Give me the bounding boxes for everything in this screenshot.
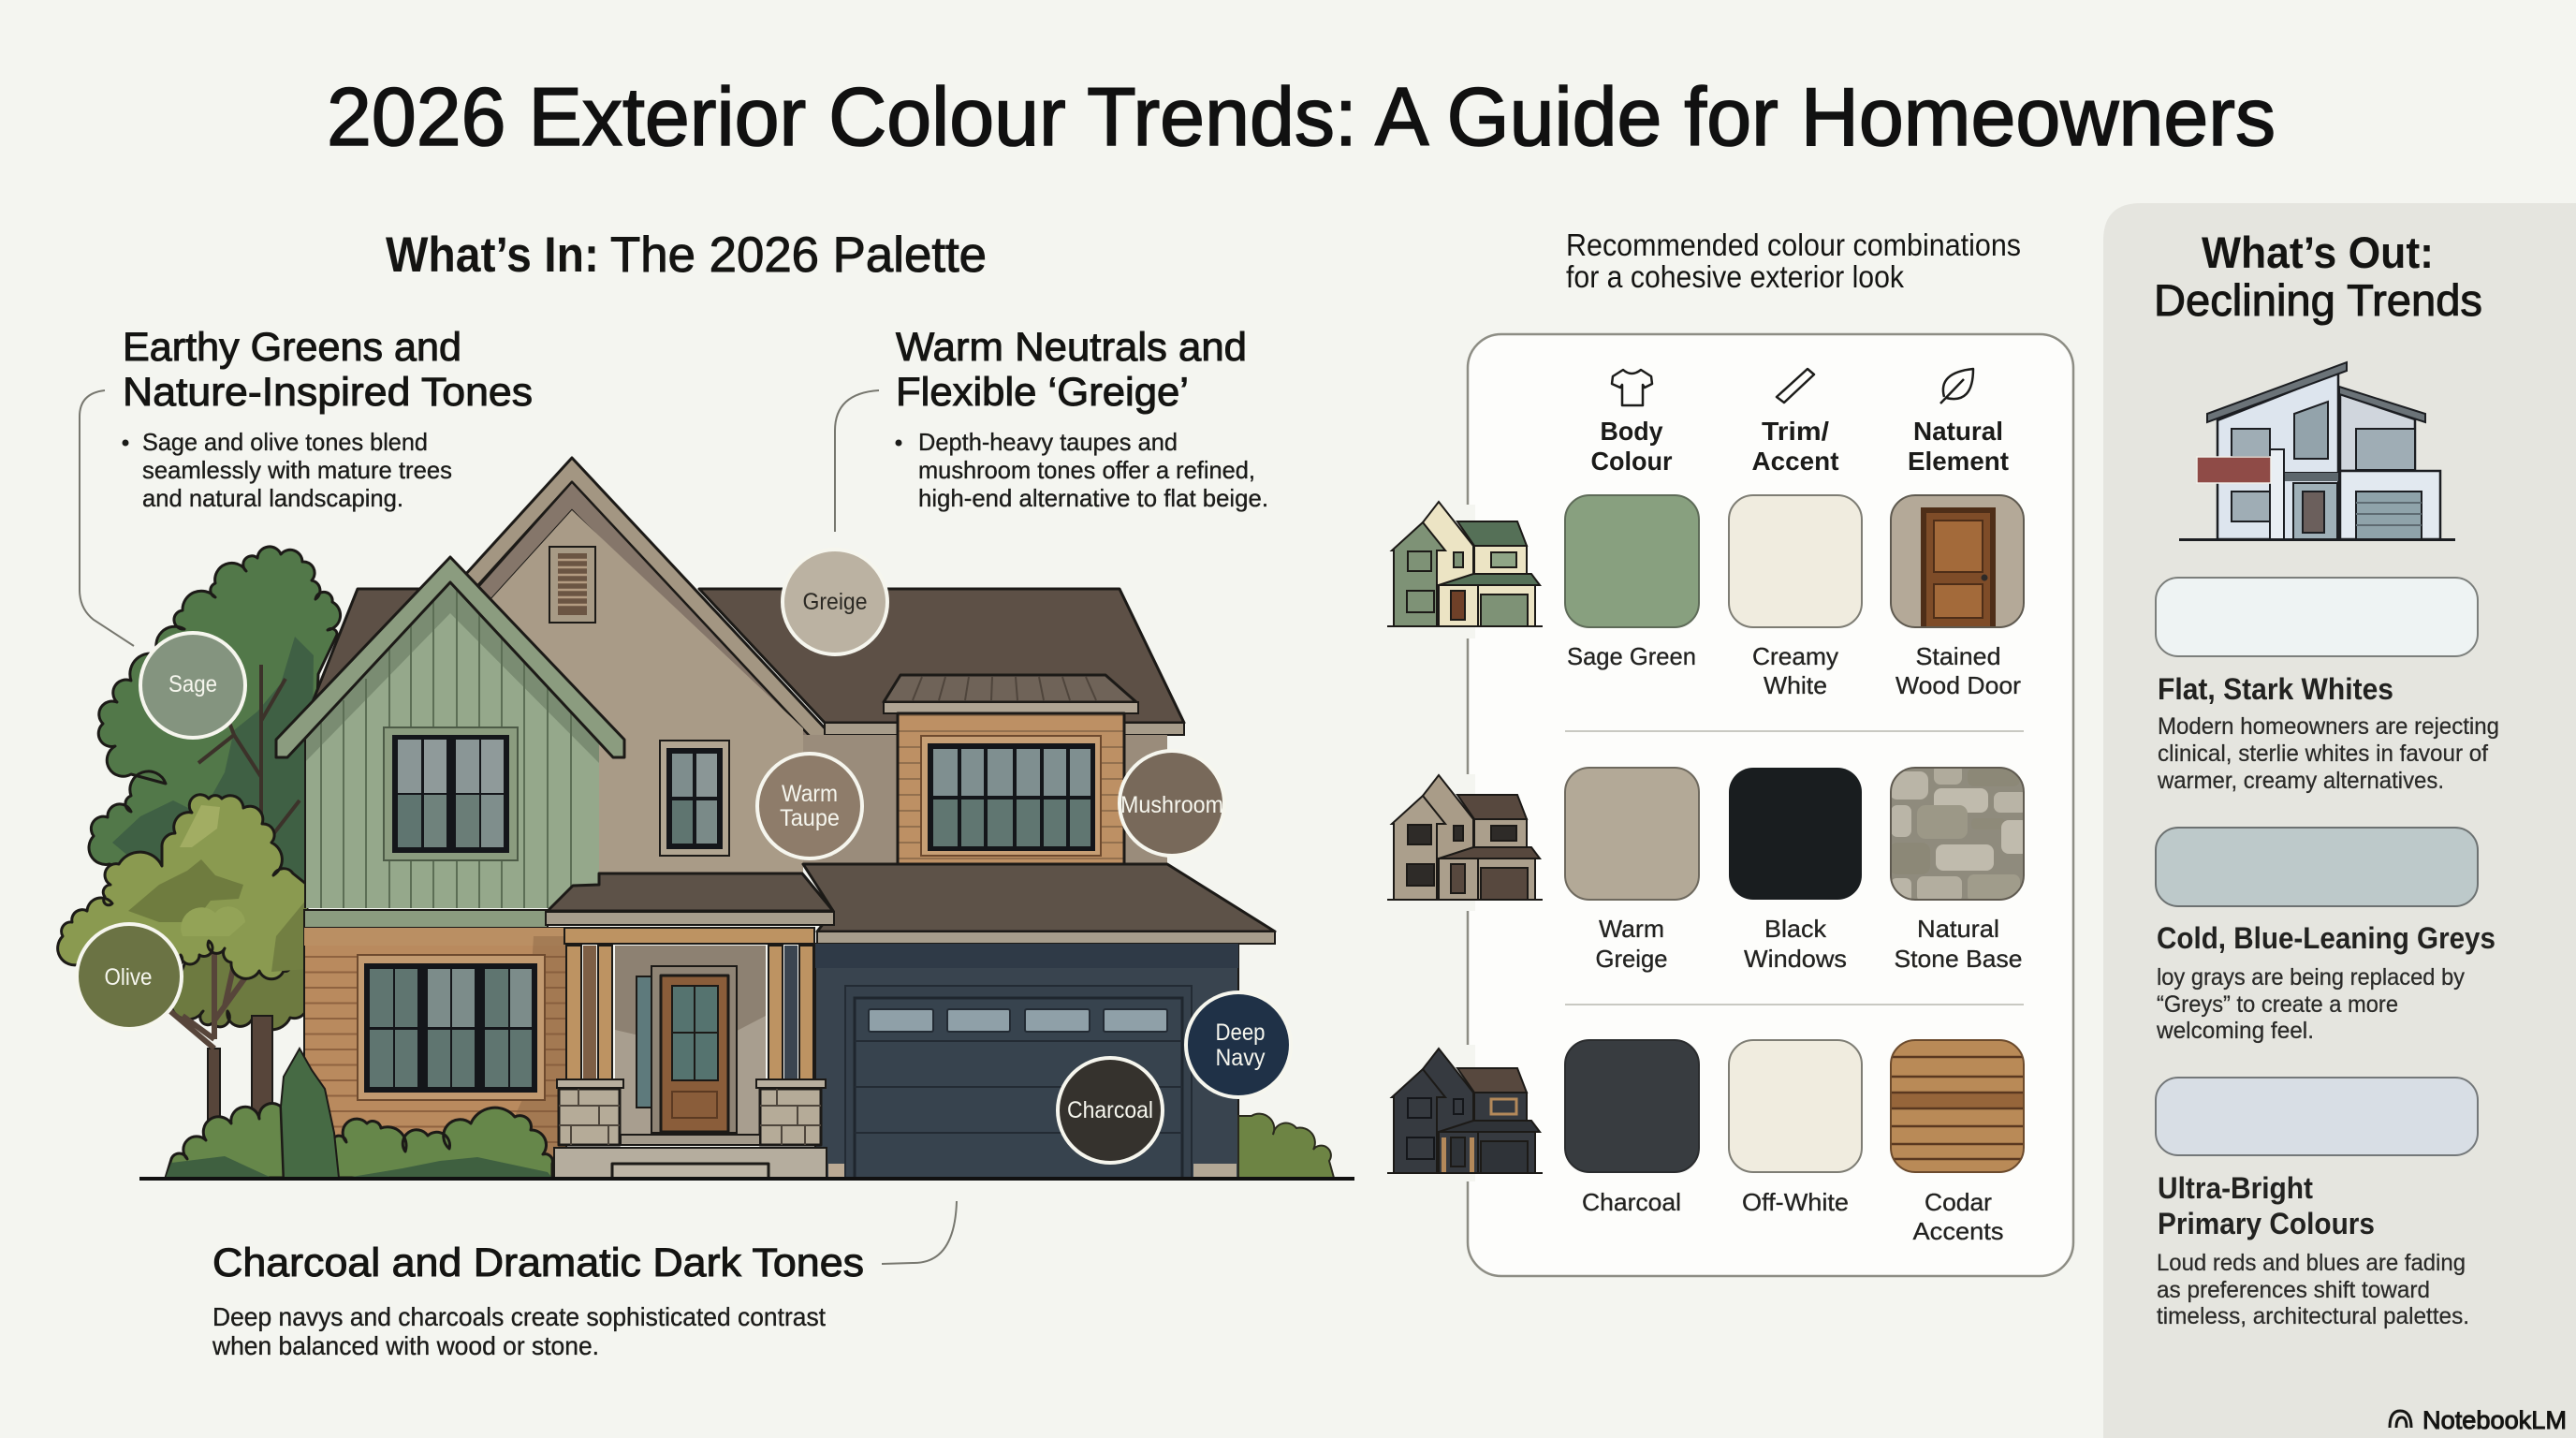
swatch: olive: Olive bbox=[105, 964, 152, 990]
panel: colour combinations bbox=[1468, 334, 2073, 1276]
section heading: what's in bbox=[386, 227, 987, 283]
trend: cold blue-leaning greys: Cold, Blue-Leaning Greys bbox=[2157, 921, 2496, 955]
back tree bbox=[89, 547, 341, 889]
row 1: sage green bbox=[1565, 495, 1699, 670]
section heading: what's in: What’s In: bbox=[386, 227, 599, 283]
back roof left bbox=[312, 589, 440, 704]
trend: ultra-bright primary colours: as preferences shift toward bbox=[2157, 1277, 2430, 1303]
row divider 2 bbox=[1565, 1004, 2024, 1005]
trend: cold blue-leaning greys bbox=[2156, 921, 2496, 1044]
swatch: charcoal bbox=[1058, 1058, 1163, 1163]
row 3: cedar accents: Codar bbox=[1925, 1188, 1992, 1216]
trend: ultra-bright primary colours: Primary Colours bbox=[2158, 1207, 2375, 1240]
steps bbox=[554, 1135, 827, 1179]
row 3: cedar accents: Accents bbox=[1913, 1217, 2003, 1245]
trend: flat stark whites: clinical, sterlie whites in favour of bbox=[2158, 741, 2488, 767]
panel: what's out bbox=[2103, 203, 2576, 1438]
swatch: stark white bbox=[2156, 578, 2478, 656]
row 2: black windows: Black bbox=[1764, 915, 1827, 943]
bullet text: earthy greens: seamlessly with mature trees bbox=[142, 456, 452, 484]
row 1: creamy white: Creamy bbox=[1752, 642, 1838, 670]
icon: sage mini house bbox=[1387, 502, 1543, 627]
foundation shrubs bbox=[166, 1049, 1334, 1178]
taupe wall bbox=[440, 510, 803, 875]
column header: trim accent: Trim/ bbox=[1762, 417, 1829, 446]
column header: natural element bbox=[1908, 369, 2009, 476]
swatch: mushroom bbox=[1120, 751, 1224, 856]
section heading: what's in: The 2026 Palette bbox=[610, 227, 987, 283]
small taupe window bbox=[660, 741, 729, 856]
bullet text: warm neutrals: high-end alternative to flat beige. bbox=[918, 484, 1268, 512]
combinations intro text: Recommended colour combinations bbox=[1566, 227, 2021, 262]
notebooklm logo: NotebookLM bbox=[2422, 1406, 2567, 1434]
leader line: earthy greens bbox=[80, 390, 134, 646]
swatch: ultra-bright bbox=[2156, 1078, 2478, 1155]
green gable wall bbox=[304, 582, 599, 908]
navy garage wall bbox=[815, 944, 1238, 1179]
swatch: warm taupe: Taupe bbox=[780, 805, 840, 831]
row 3: cedar accents bbox=[1891, 1040, 2024, 1245]
main gable roof bbox=[426, 458, 828, 741]
leader line: warm neutrals bbox=[835, 390, 879, 532]
trend: flat stark whites: Flat, Stark Whites bbox=[2158, 672, 2393, 706]
green gable trim bbox=[276, 557, 624, 757]
swatch: warm taupe: Warm bbox=[782, 781, 838, 807]
row 2: natural stone base: Stone Base bbox=[1895, 945, 2022, 973]
callout: charcoal and dark tones: when balanced with wood or stone. bbox=[212, 1331, 599, 1360]
front door bbox=[661, 976, 728, 1132]
row 3: charcoal: Charcoal bbox=[1582, 1188, 1681, 1216]
trend: flat stark whites: Modern homeowners are rejecting bbox=[2158, 713, 2499, 740]
column header: trim accent bbox=[1752, 369, 1838, 476]
swatch: cold grey bbox=[2156, 828, 2478, 906]
column header: trim accent: Accent bbox=[1752, 447, 1838, 476]
icon: greige mini house bbox=[1387, 775, 1543, 901]
heading: warm neutrals bbox=[896, 325, 1247, 415]
callout: earthy greens bbox=[122, 325, 533, 512]
swatch: deep navy: Navy bbox=[1215, 1045, 1266, 1071]
callout: warm neutrals bbox=[895, 325, 1268, 512]
column header: natural element: Element bbox=[1908, 447, 2009, 476]
heading: warm neutrals: Warm Neutrals and bbox=[896, 325, 1247, 370]
icon: charcoal mini house bbox=[1387, 1049, 1543, 1174]
house illustration bbox=[58, 458, 1354, 1181]
column header: natural element: Natural bbox=[1913, 417, 2003, 446]
row 1: sage green: Sage Green bbox=[1567, 642, 1696, 670]
column header: body colour bbox=[1591, 370, 1673, 476]
heading: what's out: What’s Out: bbox=[2202, 227, 2434, 277]
trend: cold blue-leaning greys: welcoming feel. bbox=[2156, 1018, 2314, 1044]
row 1: stained wood door bbox=[1891, 495, 2024, 699]
swatch: deep navy bbox=[1186, 992, 1291, 1097]
trend: ultra-bright primary colours: timeless, architectural palettes. bbox=[2157, 1303, 2469, 1329]
combinations intro text bbox=[1566, 227, 2021, 294]
row 1: creamy white: White bbox=[1764, 671, 1827, 699]
swatch: sage bbox=[140, 633, 245, 738]
row 2: black windows bbox=[1729, 768, 1862, 973]
bullet text: warm neutrals bbox=[895, 428, 1268, 512]
upper green window bbox=[384, 727, 518, 860]
row 2: natural stone base: Natural bbox=[1917, 915, 1999, 943]
heading: warm neutrals: Flexible ‘Greige’ bbox=[896, 370, 1189, 415]
garage roof bbox=[803, 864, 1275, 932]
trend: ultra-bright primary colours: Loud reds and blues are fading bbox=[2157, 1250, 2466, 1276]
swatch: olive bbox=[77, 924, 182, 1029]
porch fascia bbox=[546, 912, 834, 925]
column header: body colour: Body bbox=[1601, 417, 1663, 446]
porch bbox=[564, 928, 814, 1135]
row 1: creamy white bbox=[1729, 495, 1862, 699]
row 2: black windows: Windows bbox=[1744, 945, 1847, 973]
swatch: deep navy: Deep bbox=[1215, 1020, 1266, 1046]
row 2: warm greige: Greige bbox=[1595, 945, 1668, 973]
bullet text: warm neutrals: Depth-heavy taupes and bbox=[918, 428, 1178, 456]
porch roof bbox=[548, 873, 833, 911]
swatch: mushroom: Mushroom bbox=[1120, 792, 1223, 818]
title: 2026 Exterior Colour Trends: A Guide for Homeowners bbox=[327, 70, 2276, 163]
callout: charcoal and dark tones bbox=[212, 1240, 864, 1360]
trend: cold blue-leaning greys: loy grays are being replaced by bbox=[2157, 964, 2465, 990]
front tree bbox=[58, 795, 307, 1136]
row 3: charcoal bbox=[1565, 1040, 1699, 1216]
upper right wall bbox=[803, 735, 1167, 864]
lower window bbox=[358, 955, 545, 1100]
green belly band bbox=[304, 910, 548, 928]
heading: what's out bbox=[2154, 227, 2482, 325]
garage corner block bbox=[828, 1164, 1237, 1178]
callout: charcoal and dark tones: Charcoal and Dramatic Dark Tones bbox=[212, 1240, 864, 1285]
back roof right bbox=[699, 589, 1184, 723]
dormer bbox=[884, 675, 1138, 882]
trend: cold blue-leaning greys: “Greys” to create a more bbox=[2157, 991, 2398, 1018]
heading: earthy greens: Earthy Greens and bbox=[123, 325, 461, 370]
trend: flat stark whites bbox=[2157, 672, 2499, 794]
callout: charcoal and dark tones: Deep navys and charcoals create sophisticated contrast bbox=[212, 1302, 826, 1331]
swatch: greige: Greige bbox=[803, 589, 867, 615]
row 1: stained wood door: Wood Door bbox=[1895, 671, 2021, 699]
bullet text: earthy greens: Sage and olive tones blend bbox=[142, 428, 428, 456]
stone pedestals bbox=[557, 1079, 826, 1145]
trend: ultra-bright primary colours: Ultra-Bright bbox=[2158, 1171, 2313, 1205]
bullet text: warm neutrals: mushroom tones offer a refined, bbox=[918, 456, 1255, 484]
lower wood wall bbox=[304, 928, 566, 1179]
leader line: charcoal bbox=[882, 1201, 957, 1264]
heading: earthy greens: Nature-Inspired Tones bbox=[123, 370, 533, 415]
row 2: warm greige bbox=[1565, 768, 1699, 973]
row 1: stained wood door: Stained bbox=[1915, 642, 2001, 670]
gable vent bbox=[549, 547, 595, 623]
row 3: off-white bbox=[1729, 1040, 1862, 1216]
row divider 1 bbox=[1565, 730, 2024, 732]
swatch: greige bbox=[783, 550, 887, 654]
row 2: warm greige: Warm bbox=[1599, 915, 1664, 943]
row 2: natural stone base bbox=[1889, 764, 2029, 973]
column header: body colour: Colour bbox=[1591, 447, 1673, 476]
row 3: off-white: Off-White bbox=[1742, 1188, 1849, 1216]
roof fascia bbox=[825, 723, 1184, 735]
heading: what's out: Declining Trends bbox=[2154, 275, 2482, 325]
garage door bbox=[855, 998, 1182, 1179]
swatch: sage: Sage bbox=[168, 671, 217, 697]
bullet text: earthy greens bbox=[122, 428, 452, 512]
trend: flat stark whites: warmer, creamy alternatives. bbox=[2157, 768, 2444, 794]
icon: modern house bbox=[2179, 362, 2455, 541]
border gaps behind mini houses bbox=[1460, 505, 1475, 1181]
trend: ultra-bright primary colours bbox=[2157, 1171, 2469, 1329]
combinations intro text: for a cohesive exterior look bbox=[1566, 259, 1904, 294]
bullet text: earthy greens: and natural landscaping. bbox=[142, 484, 403, 512]
swatch: charcoal: Charcoal bbox=[1067, 1097, 1153, 1123]
swatch: warm taupe bbox=[757, 754, 862, 858]
garage fascia bbox=[817, 932, 1275, 944]
heading: earthy greens bbox=[123, 325, 533, 415]
ground line bbox=[139, 1177, 1354, 1181]
